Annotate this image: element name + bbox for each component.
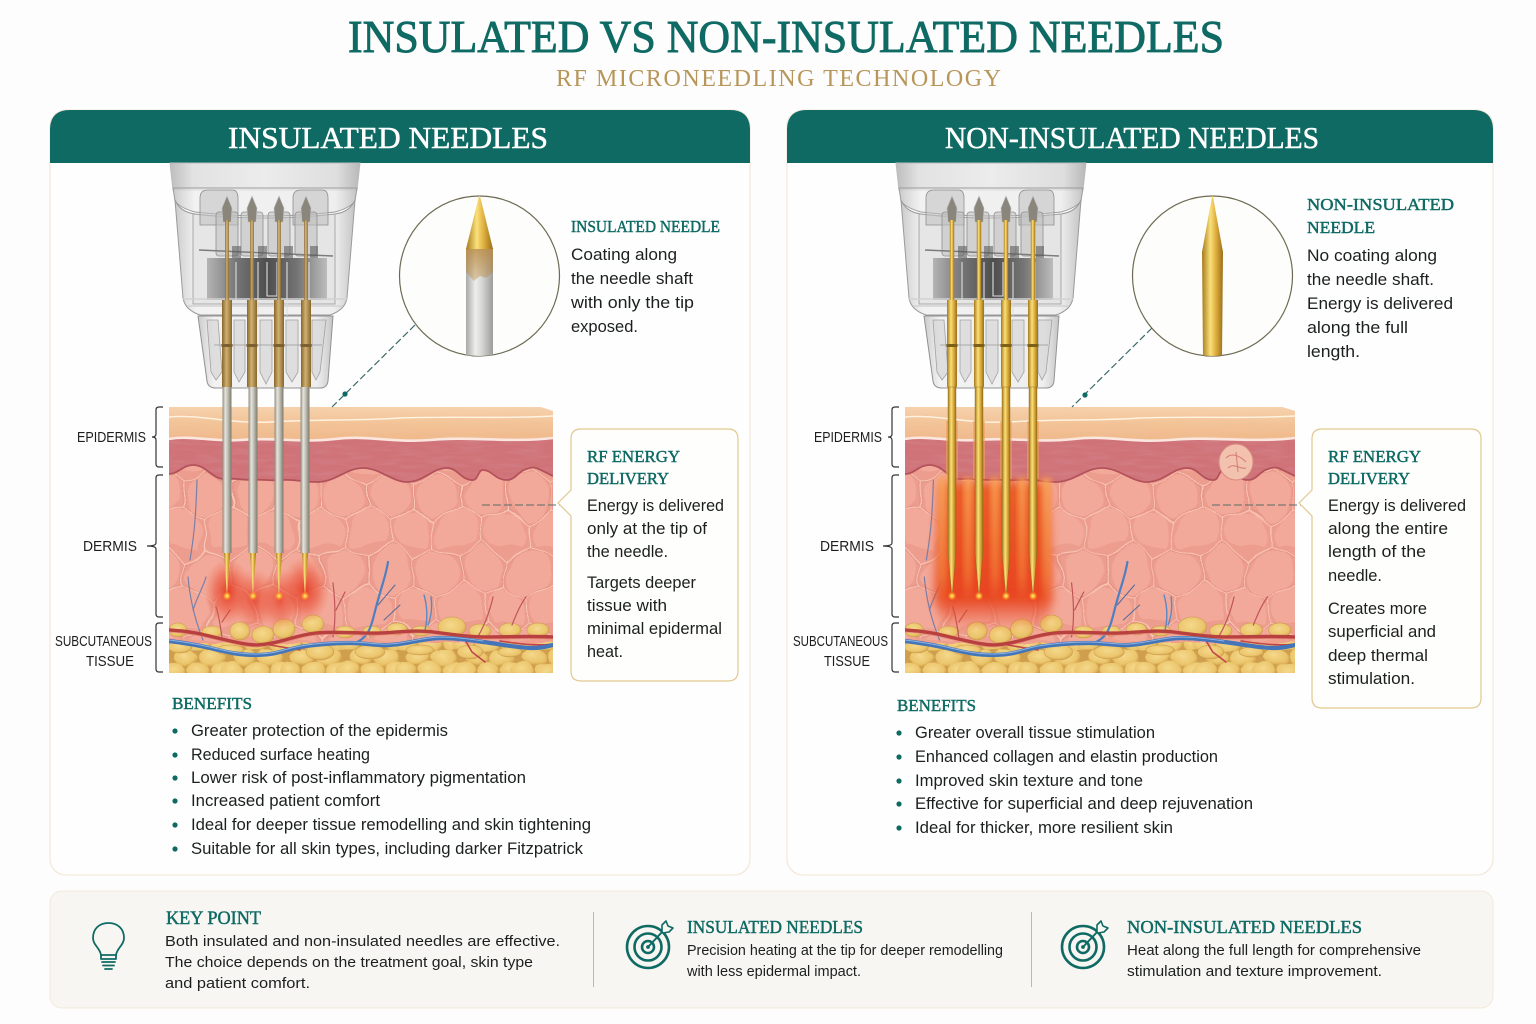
title: INSULATED VS NON-INSULATED NEEDLES bbox=[348, 11, 1224, 62]
layer labels and brackets: EPIDERMIS bbox=[814, 430, 882, 446]
key point text: KEY POINT bbox=[166, 908, 261, 929]
layer labels and brackets: SUBCUTANEOUS bbox=[55, 634, 152, 650]
callout: RF energy delivery insulated: the needle. bbox=[587, 542, 668, 561]
summary: non-insulated needles bbox=[1127, 917, 1421, 980]
callout: insulated needle bbox=[570, 217, 720, 336]
skin papule bbox=[1219, 444, 1253, 480]
callout: insulated needle: Coating along bbox=[571, 245, 677, 264]
callout: insulated needle: the needle shaft bbox=[571, 269, 693, 288]
panel header: insulated needles: INSULATED NEEDLES bbox=[228, 120, 548, 155]
benefits: non-insulated: BENEFITS bbox=[897, 696, 976, 715]
callout: RF energy delivery insulated bbox=[482, 429, 738, 681]
benefits: insulated: BENEFITS bbox=[172, 694, 252, 713]
callout: RF energy delivery non-insulated: superficial and bbox=[1328, 622, 1436, 641]
panel header: non-insulated needles bbox=[787, 110, 1493, 163]
benefits: non-insulated: Ideal for thicker, more resilient skin bbox=[915, 818, 1173, 837]
summary: insulated needles bbox=[686, 917, 1003, 980]
callout: non-insulated needle: NON-INSULATED bbox=[1307, 195, 1454, 214]
callout: RF energy delivery insulated: heat. bbox=[587, 642, 623, 661]
summary: insulated needles: INSULATED NEEDLES bbox=[687, 917, 863, 937]
key point text: The choice depends on the treatment goal, skin type bbox=[165, 954, 533, 971]
benefits: non-insulated bbox=[896, 696, 1253, 837]
fully gold needles bbox=[948, 387, 1038, 600]
handpiece: insulated bbox=[170, 163, 360, 388]
heat at needle tips bbox=[206, 560, 328, 630]
layer labels and brackets: SUBCUTANEOUS bbox=[793, 634, 888, 650]
summary: insulated needles: with less epidermal impact. bbox=[686, 963, 861, 980]
icon: target non-insulated bbox=[1062, 921, 1108, 968]
layer labels and brackets: TISSUE bbox=[86, 654, 134, 670]
summary: insulated needles: Precision heating at the tip for deeper remodelling bbox=[687, 942, 1003, 959]
callout: RF energy delivery non-insulated: length of the bbox=[1328, 542, 1426, 561]
summary: non-insulated needles: stimulation and texture improvement. bbox=[1127, 963, 1382, 980]
benefits: insulated: Greater protection of the epidermis bbox=[191, 721, 448, 740]
benefits: non-insulated: Effective for superficial and deep rejuvenation bbox=[915, 794, 1253, 813]
leader line to magnifier bbox=[332, 325, 415, 407]
skin cross-section: insulated bbox=[169, 407, 553, 673]
benefits: insulated: Ideal for deeper tissue remodelling and skin tightening bbox=[191, 815, 591, 834]
benefits: insulated bbox=[172, 694, 591, 858]
callout: RF energy delivery non-insulated: needle. bbox=[1328, 566, 1382, 585]
callout: RF energy delivery insulated: Targets deeper bbox=[587, 573, 696, 592]
callout: RF energy delivery non-insulated: DELIVERY bbox=[1328, 469, 1410, 488]
layer labels and brackets bbox=[55, 407, 163, 672]
key point text: Both insulated and non-insulated needles are effective. bbox=[165, 933, 560, 950]
key point text bbox=[165, 908, 560, 992]
callout: RF energy delivery non-insulated: deep thermal bbox=[1328, 646, 1428, 665]
benefits: non-insulated: Greater overall tissue stimulation bbox=[915, 723, 1155, 742]
icon: light bulb bbox=[93, 923, 124, 969]
callout: RF energy delivery insulated: Energy is delivered bbox=[587, 496, 724, 515]
panel: insulated needles bbox=[50, 110, 750, 875]
layer labels and brackets: EPIDERMIS bbox=[77, 430, 146, 446]
callout: RF energy delivery insulated: RF ENERGY bbox=[587, 447, 680, 466]
layer labels and brackets bbox=[793, 407, 899, 672]
callout: RF energy delivery insulated: DELIVERY bbox=[587, 469, 669, 488]
panel header: insulated needles bbox=[50, 110, 750, 163]
panel: non-insulated needles bbox=[787, 110, 1493, 875]
benefits: insulated: Lower risk of post-inflammatory pigmentation bbox=[191, 768, 526, 787]
needles with gold tips bbox=[222, 387, 310, 600]
callout: RF energy delivery non-insulated: stimulation. bbox=[1328, 669, 1415, 688]
benefits: insulated: Suitable for all skin types, including darker Fitzpatrick bbox=[191, 839, 583, 858]
icon: target insulated bbox=[627, 921, 673, 968]
callout: insulated needle: with only the tip bbox=[570, 293, 694, 312]
layer labels and brackets: DERMIS bbox=[83, 539, 137, 555]
benefits: non-insulated: Enhanced collagen and elastin production bbox=[915, 747, 1218, 766]
panel: key point footer bbox=[50, 891, 1493, 1008]
callout: RF energy delivery insulated: tissue with bbox=[587, 596, 667, 615]
callout: RF energy delivery insulated: only at the tip of bbox=[587, 519, 707, 538]
callout: non-insulated needle: No coating along bbox=[1307, 246, 1437, 265]
benefits: non-insulated: Improved skin texture and tone bbox=[915, 771, 1143, 790]
callout: insulated needle: INSULATED NEEDLE bbox=[571, 217, 720, 236]
key point text: and patient comfort. bbox=[165, 975, 310, 992]
skin cross-section: non-insulated bbox=[876, 400, 1322, 680]
magnifier: non-insulated needle bbox=[1132, 194, 1292, 358]
callout: RF energy delivery non-insulated: Creates more bbox=[1328, 599, 1427, 618]
callout: non-insulated needle: length. bbox=[1307, 342, 1360, 361]
panel header: non-insulated needles: NON-INSULATED NEEDLES bbox=[945, 120, 1319, 155]
callout: non-insulated needle: NEEDLE bbox=[1307, 218, 1375, 237]
callout: RF energy delivery non-insulated: along the entire bbox=[1328, 519, 1448, 538]
callout: non-insulated needle: Energy is delivered bbox=[1307, 294, 1453, 313]
magnifier: insulated needle tip bbox=[400, 194, 560, 358]
layer labels and brackets: TISSUE bbox=[824, 654, 870, 670]
callout: RF energy delivery non-insulated: RF ENERGY bbox=[1328, 447, 1421, 466]
callout: RF energy delivery non-insulated: Energy is delivered bbox=[1328, 496, 1466, 515]
subtitle: RF MICRONEEDLING TECHNOLOGY bbox=[556, 66, 1001, 92]
callout: insulated needle: exposed. bbox=[571, 317, 638, 336]
benefits: insulated: Increased patient comfort bbox=[191, 791, 380, 810]
callout: non-insulated needle: along the full bbox=[1307, 318, 1408, 337]
layer labels and brackets: DERMIS bbox=[820, 539, 874, 555]
heat along needle length bbox=[935, 421, 1052, 630]
callout: RF energy delivery non-insulated bbox=[1212, 429, 1481, 708]
callout: non-insulated needle: the needle shaft. bbox=[1307, 270, 1434, 289]
callout: RF energy delivery insulated: minimal epidermal bbox=[587, 619, 722, 638]
summary: non-insulated needles: NON-INSULATED NEEDLES bbox=[1127, 917, 1362, 937]
handpiece: non-insulated bbox=[896, 163, 1086, 388]
leader line to magnifier bbox=[1072, 328, 1152, 407]
benefits: insulated: Reduced surface heating bbox=[191, 745, 370, 764]
callout: non-insulated needle bbox=[1307, 195, 1454, 361]
summary: non-insulated needles: Heat along the full length for comprehensive bbox=[1127, 942, 1421, 959]
